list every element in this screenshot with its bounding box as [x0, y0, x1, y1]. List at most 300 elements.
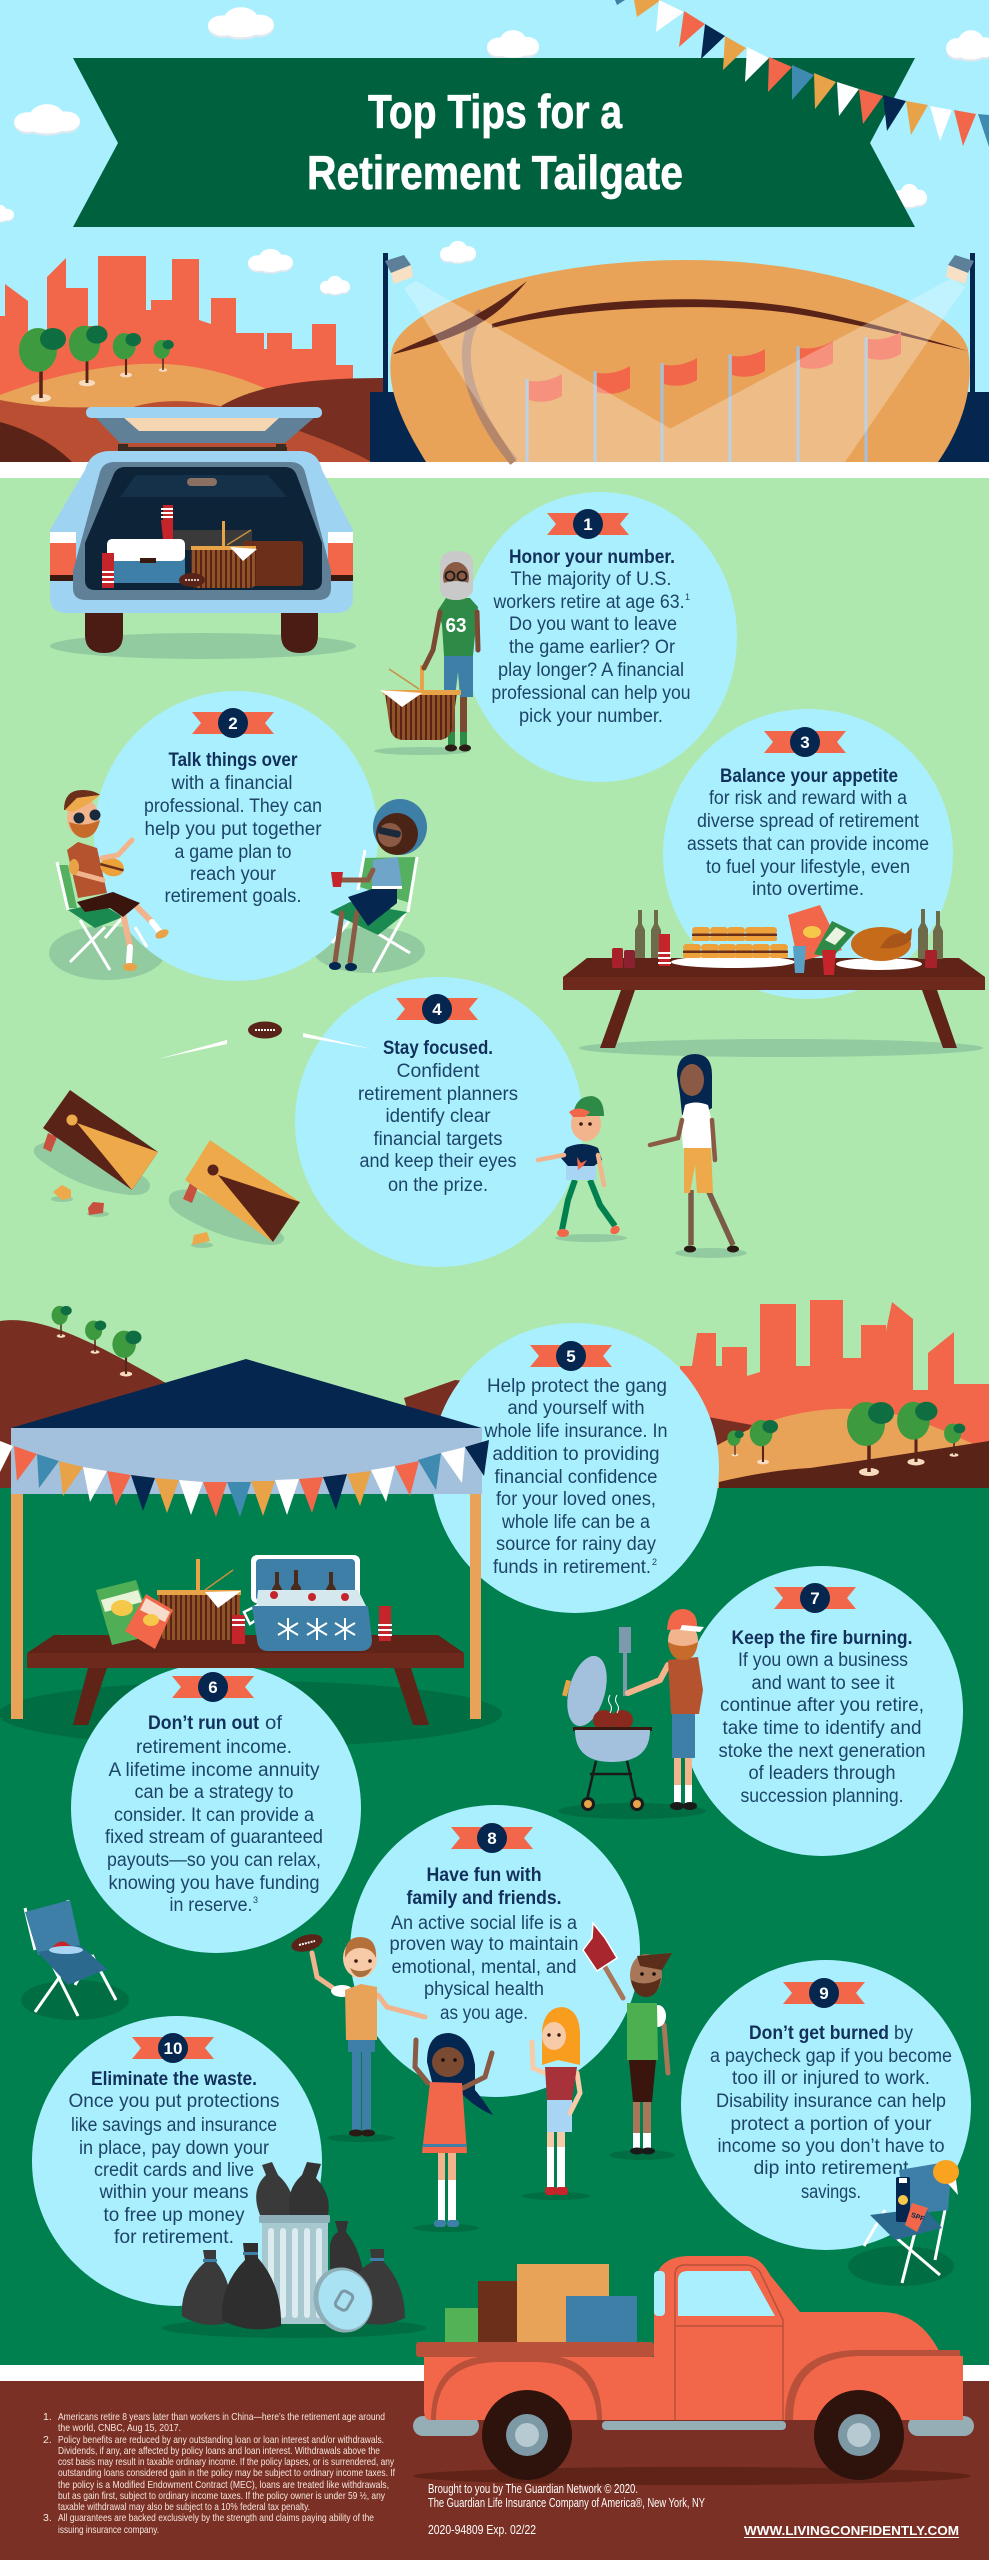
shoes	[329, 962, 357, 971]
tip 5 text: whole life can be a	[501, 1512, 650, 1533]
head	[64, 790, 100, 838]
tent	[0, 1359, 489, 1719]
tip 8 text: An active social life is a	[391, 1913, 577, 1934]
bubble	[295, 977, 583, 1267]
cups	[793, 946, 836, 975]
bubble	[94, 691, 378, 981]
tip 6 text: retirement income.	[136, 1737, 292, 1758]
trunk interior	[85, 467, 322, 590]
tip 5 text: Help protect the gang	[487, 1376, 667, 1397]
badge 2: 2	[228, 714, 238, 733]
head	[667, 1609, 704, 1660]
badge 9	[783, 1978, 865, 2008]
tip 7 text: Keep the fire burning.	[732, 1628, 912, 1649]
lid	[560, 1652, 614, 1730]
cooler	[107, 539, 185, 583]
sunscreen bottle	[896, 2177, 910, 2222]
tip 6 text: Don’t run out	[148, 1713, 260, 1734]
character: bearded man with foam finger	[583, 1923, 675, 2160]
tip 5 text: whole life insurance. In	[484, 1421, 668, 1442]
bubble	[463, 492, 737, 782]
jersey number: 63	[446, 615, 466, 637]
table top	[563, 958, 985, 990]
tip 6 text	[105, 1713, 323, 1916]
tip 3 text: assets that can provide income	[687, 834, 929, 855]
city skyline left	[0, 256, 378, 420]
tip 2 text: with a financial	[171, 773, 292, 794]
tip 1 text: the game earlier? Or	[509, 637, 676, 658]
arm	[532, 2042, 580, 2113]
shorts	[547, 2100, 572, 2132]
bubble	[350, 1805, 640, 2097]
vest and sleeve	[627, 2003, 666, 2060]
tip 1 text: The majority of U.S.	[510, 569, 672, 590]
sleeve	[331, 1985, 353, 1997]
cans	[612, 948, 937, 968]
shirt	[67, 842, 107, 898]
stadium dome	[390, 260, 970, 462]
hill left lower	[0, 1320, 260, 1488]
footnotes: Policy benefits are reduced by any outstanding loan or loan interest and/or withdrawals.	[58, 2434, 384, 2446]
steam	[608, 1695, 618, 1713]
tip 4 text: identify clear	[386, 1106, 491, 1127]
bumpers	[413, 2416, 974, 2436]
tip 8 text: family and friends.	[406, 1888, 562, 1909]
tip 10 text: in place, pay down your	[79, 2138, 270, 2159]
shoes	[684, 1246, 739, 1252]
arms	[77, 840, 132, 880]
dress	[422, 2082, 467, 2153]
credits: The Guardian Life Insurance Company of America®, New York, NY	[428, 2496, 705, 2510]
top	[545, 2067, 577, 2100]
tip 9 text: by	[894, 2023, 913, 2044]
chair	[330, 850, 417, 972]
footnotes: 3.	[43, 2512, 52, 2524]
grill and griller	[558, 1609, 706, 1819]
shoes	[123, 927, 170, 971]
badge 4: 4	[432, 1000, 442, 1019]
face	[680, 1064, 704, 1096]
stick and arms	[605, 1967, 668, 2073]
legs	[670, 1758, 697, 1810]
tent table shadow	[0, 1681, 502, 1747]
footnotes: issuing insurance company.	[58, 2524, 159, 2536]
arms	[424, 612, 478, 668]
shadow	[522, 2192, 590, 2200]
shadow	[374, 747, 470, 755]
character: bearded man in folding chair with burger	[57, 790, 170, 971]
tip 4 text: on the prize.	[388, 1175, 488, 1196]
hat	[49, 1942, 83, 1954]
hat and hair	[373, 799, 427, 855]
griller man	[619, 1609, 704, 1810]
bags on top	[256, 2162, 329, 2215]
tip 9 text: Don’t get burned	[749, 2023, 889, 2044]
tip 7 text: If you own a business	[738, 1650, 908, 1671]
badge 3	[764, 727, 846, 757]
face	[377, 823, 402, 847]
dress hem	[423, 2144, 466, 2147]
grill legs	[586, 1761, 637, 1804]
tip 7 text	[718, 1628, 926, 1807]
shoes	[557, 1224, 621, 1237]
arms	[312, 1953, 425, 2017]
tip 1 text: pick your number.	[519, 706, 663, 727]
SPF tube: SPF	[910, 2212, 926, 2223]
tip 2 text: professional. They can	[144, 796, 322, 817]
bottles	[635, 909, 943, 959]
foam finger	[583, 1923, 617, 1971]
tip 6 text: A lifetime income annuity	[108, 1760, 320, 1781]
tip 3 text: Balance your appetite	[720, 766, 898, 787]
head	[630, 1953, 672, 1997]
hair	[427, 2033, 493, 2115]
stadium flags	[527, 332, 901, 462]
panel: tip 8	[350, 1805, 640, 2097]
face	[432, 2047, 464, 2077]
tip 3 text: diverse spread of retirement	[697, 811, 920, 832]
trash can and bags	[162, 2162, 426, 2341]
character: blonde girl	[522, 2007, 590, 2200]
tip 9 text: too ill or injured to work.	[732, 2068, 930, 2089]
shadow	[327, 2134, 395, 2142]
mirror	[187, 478, 217, 486]
tip 5 text: funds in retirement.	[493, 1557, 651, 1578]
sleeve	[69, 859, 79, 875]
tip 4 text: financial targets	[374, 1129, 502, 1150]
head	[440, 551, 473, 600]
badge 6	[172, 1672, 254, 1702]
light green lawn	[0, 478, 989, 1488]
tip 6 text: fixed stream of guaranteed	[105, 1827, 323, 1848]
sun hat	[933, 2160, 959, 2195]
tip 9 text: income so you don’t have to	[718, 2136, 944, 2157]
shorts	[77, 892, 140, 917]
footnotes: the policy is a Modified Endowment Contract (MEC), loans are treated like withdrawals,	[58, 2479, 389, 2491]
white strip lower	[0, 2365, 989, 2381]
panel: tip 3	[663, 709, 953, 999]
badge 1: 1	[583, 515, 593, 534]
back right bag	[330, 2221, 366, 2290]
boxes	[445, 2264, 637, 2342]
tip 6 text: knowing you have funding	[108, 1873, 320, 1894]
arm	[628, 1665, 668, 1693]
tip 5 text: source for rainy day	[496, 1534, 656, 1555]
badge 2	[192, 708, 274, 738]
tent bunting	[0, 1440, 489, 1517]
top hem	[372, 886, 402, 889]
red cup stack	[378, 1606, 392, 1641]
chair legs	[25, 1900, 116, 2016]
footnotes: outstanding loans considered gain in the policy may be subject to ordinary income taxes. If	[58, 2467, 395, 2479]
arms	[415, 2040, 492, 2088]
hair	[542, 2007, 580, 2065]
bunting top right	[615, 0, 989, 147]
footnotes: Dividends, if any, are affected by policy loans and loan interest. Withdrawals above the	[58, 2445, 380, 2457]
badge 10	[132, 2033, 214, 2063]
chair back	[899, 2161, 952, 2215]
tip 9 text: dip into retirement	[754, 2158, 909, 2179]
tip 10 text: like savings and insurance	[71, 2115, 277, 2136]
shadow	[50, 633, 356, 659]
tip 6 text: consider. It can provide a	[114, 1805, 314, 1826]
tip 6 text: in reserve.	[170, 1895, 252, 1916]
badge 10: 10	[164, 2039, 182, 2058]
shorts	[444, 654, 473, 697]
food table	[563, 905, 985, 1057]
basket	[380, 665, 461, 740]
raised hatch	[86, 407, 322, 456]
trunk frame	[73, 462, 331, 600]
snowflakes	[278, 1618, 355, 1640]
character: girl with raised arms	[413, 2033, 493, 2232]
bubble	[681, 1960, 971, 2250]
title: Retirement Tailgate	[307, 146, 683, 199]
legs	[691, 1190, 733, 1245]
tip 8 text: Have fun with	[426, 1865, 542, 1886]
wheels	[581, 1797, 644, 1811]
chair seat	[870, 2208, 942, 2240]
tip 8 text: proven way to maintain	[390, 1934, 578, 1955]
shadow	[848, 2246, 954, 2286]
head	[569, 1096, 604, 1141]
footnotes: the world, CNBC, Aug 15, 2017.	[58, 2422, 181, 2434]
tip 10 text	[68, 2069, 280, 2248]
bubble	[681, 1566, 963, 1856]
folding chair with sunscreen and hat	[848, 2160, 959, 2286]
website link: WWW.LIVINGCONFIDENTLY.COM	[744, 2523, 959, 2538]
tip 10 text: Once you put protections	[68, 2091, 280, 2112]
shadow	[162, 2318, 426, 2338]
grill	[560, 1652, 652, 1811]
truck shadow	[413, 2467, 971, 2485]
badge 3: 3	[800, 733, 810, 752]
tip 4 text	[358, 1038, 518, 1196]
shadow	[609, 2150, 675, 2160]
tip 1 text: professional can help you	[492, 683, 690, 704]
character: boy walking	[538, 1096, 627, 1242]
footnotes: All guarantees are backed exclusively by the strength and claims paying ability of the	[58, 2512, 374, 2524]
basket	[157, 1559, 241, 1640]
badge 7: 7	[810, 1589, 820, 1608]
tip 2 text: reach your	[190, 864, 277, 885]
badge 4	[396, 994, 478, 1024]
tip 3 text: into overtime.	[752, 879, 864, 900]
clouds	[0, 7, 989, 296]
tip 1 text: workers retire at age 63.	[493, 592, 684, 613]
tip 9 text: savings.	[801, 2182, 861, 2203]
bean bags	[51, 1185, 213, 1248]
trees left	[19, 326, 174, 402]
orange board	[183, 1140, 300, 1242]
title banner	[73, 58, 915, 227]
tent table	[27, 1555, 464, 1725]
tip 7 text: take time to identify and	[722, 1718, 922, 1739]
lamp right	[946, 255, 974, 284]
head	[343, 1937, 377, 1978]
arms	[538, 1155, 604, 1185]
tent roof	[11, 1359, 482, 1428]
shadow under woman	[313, 927, 425, 973]
tent poles	[11, 1494, 481, 1719]
tip 7 text: succession planning.	[740, 1786, 904, 1807]
fenders	[431, 2350, 963, 2420]
tip 7 text: stoke the next generation	[718, 1741, 926, 1762]
tip 6 text: can be a strategy to	[134, 1782, 294, 1803]
tip 2 text: retirement goals.	[164, 886, 302, 907]
chair	[57, 862, 147, 970]
bubble	[431, 1323, 719, 1613]
tip 5 text	[484, 1376, 668, 1578]
tip 5 text: addition to providing	[492, 1444, 660, 1465]
shirt	[681, 1102, 712, 1148]
footer panel background	[0, 2381, 989, 2560]
tip 9 text: a paycheck gap if you become	[710, 2046, 952, 2067]
credits	[428, 2482, 705, 2537]
tip 1 text: play longer? A financial	[498, 660, 684, 681]
footnotes: Americans retire 8 years later than workers in China—here’s the retirement age around	[58, 2411, 385, 2423]
cup stack	[658, 934, 671, 966]
wheels	[85, 610, 318, 653]
tip 1 text: Honor your number.	[509, 547, 675, 568]
tip 10 text: credit cards and live	[94, 2160, 254, 2181]
bubble	[71, 1663, 361, 1953]
character: man with football	[289, 1931, 425, 2142]
tip 2 text: help you put together	[144, 819, 322, 840]
credits: 2020-94809 Exp. 02/22	[428, 2523, 536, 2537]
shadow under man 2	[49, 926, 165, 980]
character: woman walking	[650, 1054, 747, 1258]
credits: Brought to you by The Guardian Network © 2020.	[428, 2482, 638, 2496]
badge 6: 6	[208, 1678, 218, 1697]
panel: tip 9	[681, 1960, 971, 2250]
legs	[434, 2150, 459, 2227]
folding chair with red hat	[21, 1900, 129, 2020]
tip 2 text	[144, 750, 322, 907]
shadow	[579, 1039, 983, 1057]
tip 2 text: Talk things over	[168, 750, 298, 771]
door lines	[675, 2265, 783, 2420]
character: woman in folding chair with hat and cup	[329, 799, 427, 972]
rear window tint	[120, 475, 287, 497]
bed and body	[424, 2256, 963, 2420]
football	[289, 1931, 325, 1955]
shirt	[668, 1657, 703, 1714]
tip 3 text: to fuel your lifestyle, even	[706, 857, 910, 878]
front wheel	[814, 2390, 904, 2480]
stadium base	[370, 392, 989, 462]
tip 1 text: 1	[685, 592, 690, 602]
cornhole boards	[34, 1090, 300, 1248]
tip 7 text: of leaders through	[748, 1763, 896, 1784]
shorts	[672, 1714, 695, 1758]
tip 6 text: 3	[253, 1895, 258, 1905]
tip 4 text: Confident	[396, 1061, 480, 1082]
legs	[445, 697, 471, 752]
legs	[348, 2040, 375, 2136]
chair legs	[864, 2210, 945, 2283]
title	[307, 85, 683, 199]
footnotes: 1.	[43, 2411, 52, 2423]
face	[542, 2022, 566, 2050]
shorts	[684, 1148, 713, 1193]
footnotes: cost basis may result in taxable ordinary income. If the policy lapses, or is surrendered, any	[58, 2456, 395, 2468]
lamp left	[385, 255, 413, 284]
badge 5: 5	[566, 1347, 576, 1366]
badge 1	[547, 509, 629, 539]
shorts	[629, 2060, 656, 2102]
light pole left	[383, 253, 388, 392]
tip 9 text: Disability insurance can help	[716, 2091, 946, 2112]
panel: tip 7	[681, 1566, 963, 1856]
tip 10 text: to free up money	[104, 2205, 245, 2226]
rear wheel	[482, 2390, 572, 2480]
legs	[630, 2100, 655, 2154]
tip 6 text: payouts—so you can relax,	[107, 1850, 321, 1871]
chair seat	[38, 1945, 107, 1985]
badge 8	[451, 1823, 533, 1853]
table legs	[600, 990, 957, 1048]
red cup	[232, 1615, 245, 1644]
tip 7 text: and want to see it	[752, 1673, 895, 1694]
footnotes	[43, 2411, 395, 2536]
bed rail	[416, 2342, 654, 2357]
chair back	[25, 1900, 80, 1955]
cargo	[102, 505, 303, 588]
legs	[562, 1180, 615, 1230]
badge 8: 8	[487, 1829, 497, 1848]
tip 3 text	[687, 766, 929, 900]
jersey	[438, 598, 478, 656]
tip 10 text: within your means	[99, 2182, 248, 2203]
tip 4 text: Stay focused.	[383, 1038, 493, 1059]
bubble	[32, 2016, 322, 2306]
board shadows	[34, 1135, 284, 1245]
chip bags	[96, 1580, 173, 1649]
hills right	[404, 1380, 989, 1488]
tip 4 text: and keep their eyes	[360, 1151, 516, 1172]
tip 5 text: for your loved ones,	[496, 1489, 656, 1510]
basket	[191, 521, 257, 588]
table top	[27, 1635, 464, 1668]
footnotes: taxable withdrawal may also be subject to a 10% federal tax penalty.	[58, 2501, 310, 2513]
stadium	[370, 253, 989, 462]
arms	[650, 1120, 715, 1160]
tip 8 text: emotional, mental, and	[392, 1957, 576, 1978]
bowl	[573, 1727, 652, 1762]
tip 8 text: as you age.	[440, 2003, 528, 2024]
city skyline right	[680, 1300, 989, 1488]
skirt	[348, 889, 397, 926]
stadium seams	[394, 281, 968, 462]
side stripes	[50, 532, 353, 581]
can	[259, 2215, 330, 2324]
tip 1 text	[492, 547, 690, 727]
panel: tip 10	[32, 2016, 322, 2306]
dark board	[43, 1090, 158, 1190]
shadow	[555, 1234, 627, 1242]
car body	[50, 451, 353, 613]
bag ties	[203, 2252, 384, 2262]
legs	[335, 912, 357, 962]
shadow	[21, 1980, 129, 2020]
white strip	[0, 462, 989, 478]
SUV with open trunk	[50, 407, 356, 659]
tip 8 text: physical health	[424, 1979, 544, 2000]
tip 2 text: a game plan to	[174, 842, 292, 863]
meat	[593, 1710, 633, 1730]
arm and cup	[331, 870, 373, 887]
